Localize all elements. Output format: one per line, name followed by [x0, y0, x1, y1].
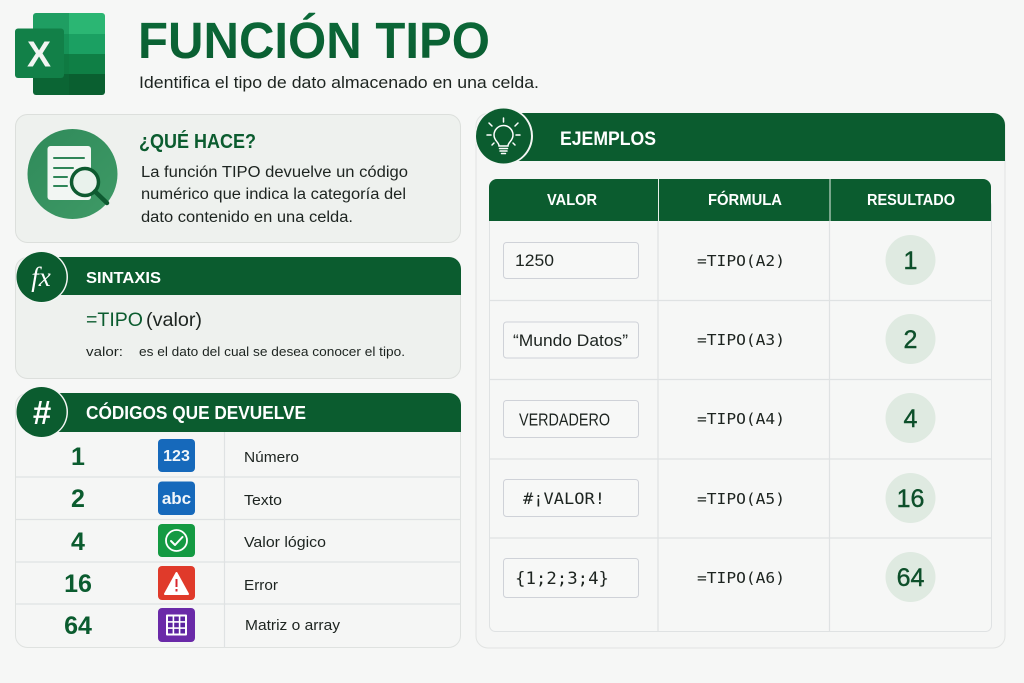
formula: =TIPO	[86, 309, 143, 331]
header band: sintaxis	[50, 257, 461, 295]
formula	[86, 309, 202, 331]
row: {1;2;3;4}: {1;2;3;4}	[515, 569, 609, 588]
row: {1;2;3;4}	[504, 552, 936, 602]
panel: sintaxis	[16, 251, 461, 378]
icon: light bulb	[475, 107, 533, 165]
row: {1;2;3;4}: =TIPO(A6)	[697, 569, 785, 587]
table header: RESULTADO	[867, 192, 955, 209]
argument description: valor:	[86, 344, 123, 359]
row: 4 valor lógico: 4	[71, 528, 85, 556]
icon: Excel logo	[15, 13, 105, 95]
table header: VALOR	[547, 192, 597, 209]
icon: hash: #	[33, 394, 51, 431]
argument description: es el dato del cual se desea conocer el tipo.	[139, 344, 405, 359]
heading: qué hace: ¿QUÉ HACE?	[139, 130, 256, 153]
row: VERDADERO	[504, 393, 936, 443]
row: 1 número: 1	[71, 443, 85, 471]
row: 16 error	[64, 566, 278, 600]
description text: dato contenido en una celda.	[141, 209, 353, 226]
row: 2 texto	[71, 482, 282, 515]
row: #¡VALOR!: 16	[897, 485, 924, 513]
table of examples	[489, 179, 992, 632]
row: {1;2;3;4}: 64	[897, 564, 924, 592]
row: VERDADERO: VERDADERO	[519, 410, 610, 430]
icon: Excel logo: X	[27, 34, 51, 74]
heading: sintaxis: SINTAXIS	[86, 270, 161, 287]
row: 1250	[504, 235, 936, 285]
row: VERDADERO: 4	[904, 405, 918, 433]
row: #¡VALOR!	[504, 473, 936, 523]
formula: (valor)	[146, 309, 202, 331]
row: #¡VALOR!: =TIPO(A5)	[697, 490, 785, 508]
row: 1 número: 123	[163, 448, 190, 465]
description text: La función TIPO devuelve un código	[141, 164, 408, 181]
row: 16 error: 16	[64, 570, 92, 598]
row: 64 matriz: Matriz o array	[245, 618, 341, 634]
heading: códigos: CÓDIGOS QUE DEVUELVE	[86, 402, 306, 423]
subtitle: Identifica el tipo de dato almacenado en una celda.	[139, 73, 539, 92]
heading: ejemplos: EJEMPLOS	[560, 129, 656, 150]
row: 1250: 1	[904, 247, 917, 275]
row: 1 número: Número	[244, 450, 299, 466]
row: Mundo Datos: =TIPO(A3)	[697, 331, 785, 349]
row: 16 error: Error	[244, 578, 278, 594]
icon: document with magnifier	[28, 129, 118, 219]
row: 1250: =TIPO(A2)	[697, 252, 785, 270]
title: FUNCIÓN TIPO	[138, 12, 490, 69]
row: 1 número	[71, 439, 299, 472]
table header: FÓRMULA	[708, 191, 782, 209]
panel: ejemplos	[475, 107, 1005, 648]
row: 4 valor lógico	[71, 524, 326, 557]
row: Mundo Datos	[504, 314, 936, 364]
header band: ejemplos	[510, 113, 1005, 161]
row: 64 matriz	[64, 608, 341, 642]
icon: fx: fx	[31, 262, 51, 292]
header band: códigos	[50, 393, 461, 432]
row: VERDADERO: =TIPO(A4)	[697, 410, 785, 428]
row: #¡VALOR!: #¡VALOR!	[523, 489, 605, 508]
description text	[141, 164, 408, 226]
panel: códigos que devuelve	[16, 386, 461, 648]
table header	[489, 179, 991, 221]
row: Mundo Datos: 2	[904, 326, 917, 354]
row: 2 texto: abc	[162, 489, 191, 508]
row: 64 matriz: 64	[64, 612, 92, 640]
icon: hash	[16, 386, 68, 438]
icon: fx	[16, 251, 68, 303]
description text: numérico que indica la categoría del	[141, 186, 406, 203]
row: 2 texto: 2	[71, 485, 85, 513]
row: 4 valor lógico: Valor lógico	[244, 535, 326, 551]
row: 2 texto: Texto	[244, 493, 282, 509]
row: Mundo Datos: “Mundo Datos”	[513, 332, 628, 350]
row: 1250: 1250	[515, 252, 554, 270]
panel: qué hace	[16, 114, 460, 242]
